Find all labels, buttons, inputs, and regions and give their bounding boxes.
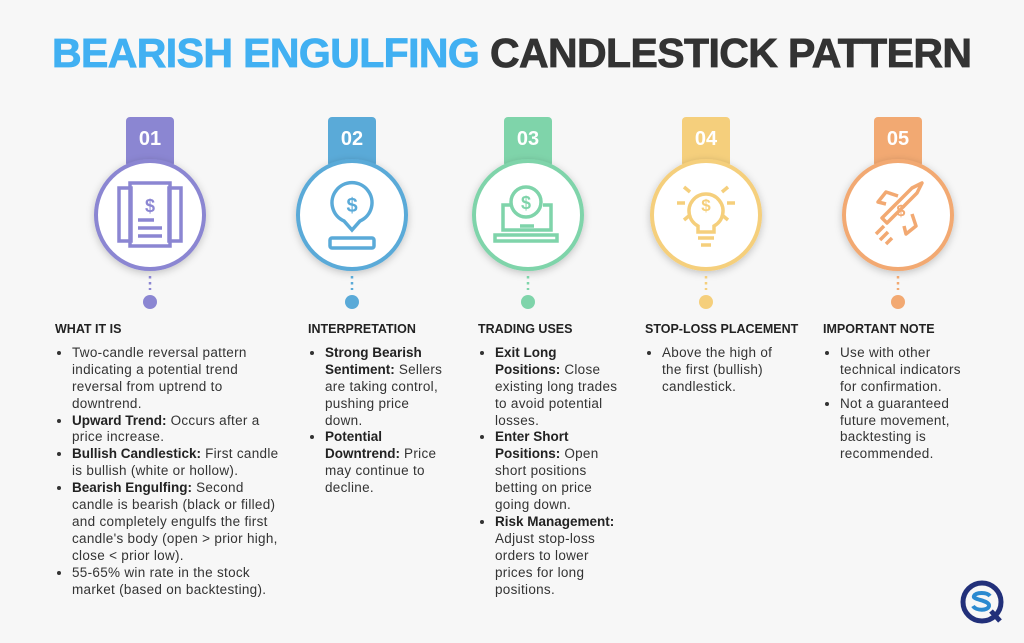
logo: [960, 580, 1004, 624]
panel: stop-loss placement: [645, 322, 798, 394]
panel: what it is: 55-65% win rate in the stock: [72, 565, 250, 580]
panel: interpretation: INTERPRETATION: [308, 322, 416, 336]
panel: trading uses: positions.: [495, 582, 555, 597]
panel: important note: Use with other: [840, 345, 930, 360]
panel: what it is: and completely engulfs the first: [72, 514, 268, 529]
panel: stop-loss placement: candlestick.: [662, 379, 736, 394]
panel: interpretation: Sentiment: Sellers: [325, 362, 442, 377]
panel: stop-loss placement: the first (bullish): [662, 362, 763, 377]
panel: what it is: candle's body (open > prior high,: [72, 531, 278, 546]
panel: trading uses: going down.: [495, 497, 571, 512]
title: BEARISH ENGULFING CANDLESTICK PATTERN: [52, 30, 972, 76]
panel: interpretation: are taking control,: [325, 379, 438, 394]
panel: what it is: reversal from uptrend to: [72, 379, 223, 394]
step 04: $: [701, 196, 711, 215]
panel: what it is: indicating a potential trend: [72, 362, 238, 377]
step 01: $: [145, 196, 155, 216]
step 02: [298, 117, 406, 309]
step 04: 04: [695, 128, 718, 150]
panel: trading uses: Positions: Open: [495, 446, 599, 461]
panel: interpretation: Downtrend: Price: [325, 446, 436, 461]
panel: what it is: is bullish (white or hollow).: [72, 463, 238, 478]
step 03: 03: [517, 128, 539, 150]
panel: trading uses: existing long trades: [495, 379, 617, 394]
panel: what it is: Bearish Engulfing: Second: [72, 480, 244, 495]
panel: trading uses: Risk Management:: [495, 514, 614, 529]
panel: stop-loss placement: Above the high of: [662, 345, 772, 360]
panel: interpretation: Potential: [325, 429, 382, 444]
step 01: [96, 117, 204, 309]
icon: rocket: [876, 183, 922, 244]
panel: important note: backtesting is: [840, 429, 926, 444]
panel: trading uses: betting on price: [495, 480, 592, 495]
panel: trading uses: losses.: [495, 413, 539, 428]
panel: what it is: Bullish Candlestick: First candle: [72, 446, 278, 461]
panel: important note: IMPORTANT NOTE: [823, 322, 935, 336]
panel: trading uses: Adjust stop-loss: [495, 531, 595, 546]
panel: interpretation: down.: [325, 413, 363, 428]
panel: interpretation: pushing price: [325, 396, 409, 411]
step 05: [844, 117, 952, 309]
panel: trading uses: Positions: Close: [495, 362, 600, 377]
step 01: 01: [139, 128, 161, 150]
icon: location pin: [330, 183, 374, 248]
step 02: 02: [341, 128, 363, 150]
panel: interpretation: may continue to: [325, 463, 425, 478]
panel: trading uses: prices for long: [495, 565, 584, 580]
panel: important note: [823, 322, 961, 461]
panel: important note: Not a guaranteed: [840, 396, 949, 411]
icon: lightbulb: [677, 187, 735, 245]
panel: what it is: price increase.: [72, 429, 164, 444]
panel: trading uses: TRADING USES: [478, 322, 572, 336]
panel: trading uses: orders to lower: [495, 548, 589, 563]
panel: important note: future movement,: [840, 413, 950, 428]
panel: interpretation: decline.: [325, 480, 374, 495]
step 03: [474, 117, 582, 309]
step 03: $: [521, 193, 531, 213]
panel: what it is: market (based on backtesting).: [72, 582, 266, 597]
panel: interpretation: Strong Bearish: [325, 345, 422, 360]
step 05: 05: [887, 128, 909, 150]
panel: trading uses: [478, 322, 617, 597]
panel: stop-loss placement: STOP-LOSS PLACEMENT: [645, 322, 798, 336]
panel: trading uses: short positions: [495, 463, 587, 478]
panel: what it is: downtrend.: [72, 396, 142, 411]
panel: trading uses: to avoid potential: [495, 396, 602, 411]
step 04: [652, 117, 760, 309]
panel: what it is: Upward Trend: Occurs after a: [72, 413, 260, 428]
panel: what it is: WHAT IT IS: [55, 322, 121, 336]
panel: important note: for confirmation.: [840, 379, 942, 394]
panel: what it is: candle is bearish (black or filled): [72, 497, 275, 512]
panel: important note: technical indicators: [840, 362, 961, 377]
panel: trading uses: Exit Long: [495, 345, 556, 360]
panel: what it is: [55, 322, 278, 597]
step 02: $: [346, 195, 358, 217]
icon: laptop coin: [495, 187, 557, 241]
icon: document: [119, 183, 181, 246]
panel: interpretation: [308, 322, 442, 495]
steps graphics: [90, 117, 958, 309]
panel: trading uses: Enter Short: [495, 429, 569, 444]
panel: what it is: Two-candle reversal pattern: [72, 345, 247, 360]
panel: what it is: close < prior low).: [72, 548, 184, 563]
step 05: $: [897, 203, 906, 220]
panel: important note: recommended.: [840, 446, 934, 461]
